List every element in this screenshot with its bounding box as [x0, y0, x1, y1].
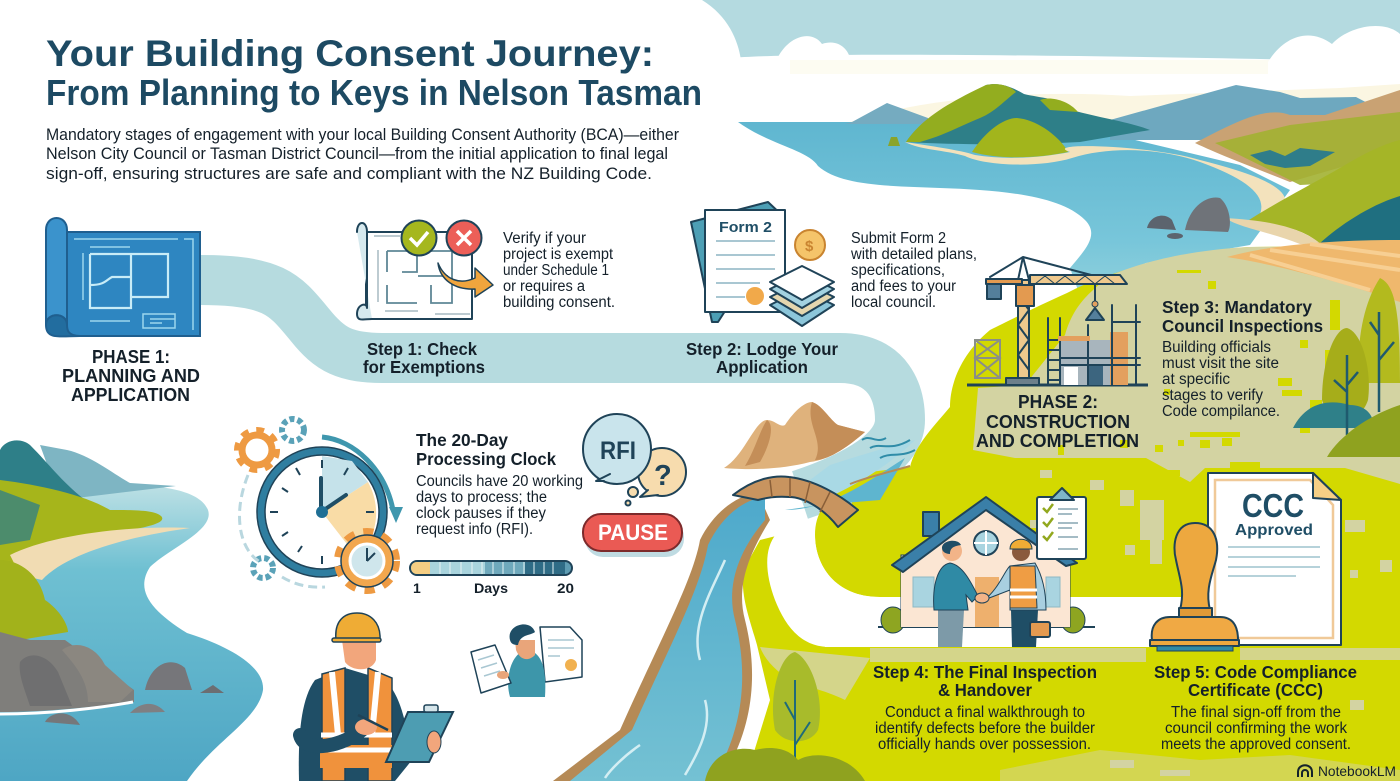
step 3 text: Building officials [1162, 339, 1271, 356]
tree bottom left [705, 652, 865, 781]
step 5 text [1154, 662, 1357, 753]
phase 2 heading [976, 392, 1139, 451]
orange field [1227, 240, 1400, 302]
handshake [975, 593, 989, 603]
step 1 text: or requires a [503, 278, 585, 295]
step 1 text: project is exempt [503, 246, 614, 263]
step 3 text: Council Inspections [1162, 316, 1323, 336]
title: From Planning to Keys in Nelson Tasman [46, 72, 702, 113]
background: left coast [0, 440, 263, 781]
background: light blue journey path [200, 280, 900, 495]
notebooklm logo: NotebookLM [1318, 763, 1396, 779]
illustration: ccc certificate and stamp: CCC [1242, 487, 1304, 524]
step 3 text [1162, 297, 1323, 420]
intro text: sign-off, ensuring structures are safe and compliant with the NZ Building Code. [46, 164, 652, 183]
clock text: Processing Clock [416, 449, 556, 469]
background: sky and clouds [702, 0, 1400, 122]
beach [905, 142, 1285, 218]
icon: blueprint [46, 218, 200, 336]
icon: form 2 and fee [691, 202, 834, 326]
phase 2 heading: AND COMPLETION [976, 431, 1139, 451]
clock text: The 20-Day [416, 430, 508, 450]
step 3 text: Code compilance. [1162, 403, 1280, 420]
icon: plans with check and cross [357, 220, 493, 320]
step 3 text: stages to verify [1162, 387, 1263, 404]
intro text: Mandatory stages of engagement with your local Building Consent Authority (BCA)—either [46, 125, 679, 144]
clock text: Councils have 20 working [416, 473, 583, 490]
step 2 text: Submit Form 2 [851, 230, 946, 247]
step 2 text: Application [716, 357, 808, 377]
illustration: applicant with documents [471, 624, 582, 697]
step 4 text: & Handover [938, 680, 1032, 700]
step 3 text: at specific [1162, 371, 1230, 388]
step 1 text [363, 230, 615, 377]
illustration: handover at house [878, 488, 1095, 647]
background: bay and coastline [738, 84, 1400, 293]
days progress bar: 1 [413, 580, 421, 596]
phase 1 heading [62, 347, 200, 405]
icon: RFI speech bubbles: ? [654, 460, 672, 492]
icon: RFI speech bubbles [583, 414, 686, 506]
step 4 text: officially hands over possession. [878, 736, 1091, 753]
step 4 text [873, 662, 1097, 753]
icon: water waves [862, 438, 915, 458]
phase 1 heading: PHASE 1: [92, 347, 170, 367]
title: Your Building Consent Journey: [46, 33, 654, 74]
tan hills [1195, 90, 1400, 182]
sea rocks [1185, 197, 1230, 232]
green hills right [1246, 140, 1400, 244]
step 4 text: Step 4: The Final Inspection [873, 662, 1097, 682]
step 3 text: must visit the site [1162, 355, 1279, 372]
teal island [906, 84, 1150, 144]
phase 2 heading: CONSTRUCTION [986, 412, 1130, 432]
step 1 text: Step 1: Check [367, 339, 477, 359]
step 5 text: Step 5: Code Compliance [1154, 662, 1357, 682]
clock text: days to process; the [416, 489, 547, 506]
clock text [416, 430, 583, 538]
step 2 text: specifications, [851, 262, 945, 279]
phase 1 heading: APPLICATION [71, 385, 190, 405]
phase 2 heading: PHASE 2: [1018, 392, 1098, 412]
step 4 text: identify defects before the builder [875, 720, 1095, 737]
title [46, 33, 702, 113]
clock text: request info (RFI). [416, 521, 533, 538]
illustration: inspector with clipboard [299, 613, 453, 781]
intro text [46, 125, 679, 183]
step 5 text: meets the approved consent. [1161, 736, 1351, 753]
step 1 text: under Schedule 1 [503, 262, 609, 279]
icon: form 2 and fee: Form 2 [719, 219, 772, 236]
background: river [553, 440, 915, 781]
step 2 text: and fees to your [851, 278, 956, 295]
illustration: ccc certificate and stamp: Approved [1235, 522, 1313, 539]
days progress bar [410, 561, 574, 596]
clock text: clock pauses if they [416, 505, 546, 522]
step 2 text: with detailed plans, [850, 246, 977, 263]
phase 1 heading: PLANNING AND [62, 366, 200, 386]
checklist clipboard [1037, 497, 1086, 559]
illustration: ccc certificate and stamp [1150, 473, 1341, 651]
background: land [743, 240, 1400, 781]
white road [767, 520, 1212, 647]
days progress bar: Days [474, 580, 508, 596]
step 5 text: Certificate (CCC) [1188, 680, 1323, 700]
intro text: Nelson City Council or Tasman District Council—from the initial application to final legal [46, 144, 668, 163]
step 2 text [686, 230, 977, 377]
coastal rocks [0, 632, 134, 712]
step 2 text: Step 2: Lodge Your [686, 339, 838, 359]
step 4 text: Conduct a final walkthrough to [885, 704, 1085, 721]
front green hill [972, 118, 1068, 157]
step 2 text: local council. [851, 294, 936, 311]
days progress bar: 20 [557, 580, 574, 596]
step 1 text: Verify if your [503, 230, 586, 247]
trees right [1293, 278, 1400, 457]
left man [938, 610, 964, 647]
step 5 text: The final sign-off from the [1171, 704, 1341, 721]
right worker [1011, 610, 1038, 647]
icon: processing clock with gears [239, 419, 403, 587]
pause button [583, 514, 684, 557]
icon: RFI speech bubbles: RFI [600, 437, 636, 465]
icon: tan mountains [724, 402, 865, 469]
step 1 text: building consent. [503, 294, 615, 311]
step 1 text: for Exemptions [363, 357, 485, 377]
step 3 text: Step 3: Mandatory [1162, 297, 1312, 317]
icon: tower crane and building [967, 257, 1148, 385]
step 5 text: council confirming the work [1165, 720, 1347, 737]
land speckles [1058, 270, 1340, 476]
icon: form 2 and fee: $ [805, 238, 814, 255]
icon: wooden bridge [733, 476, 858, 527]
pause button: PAUSE [598, 520, 668, 545]
